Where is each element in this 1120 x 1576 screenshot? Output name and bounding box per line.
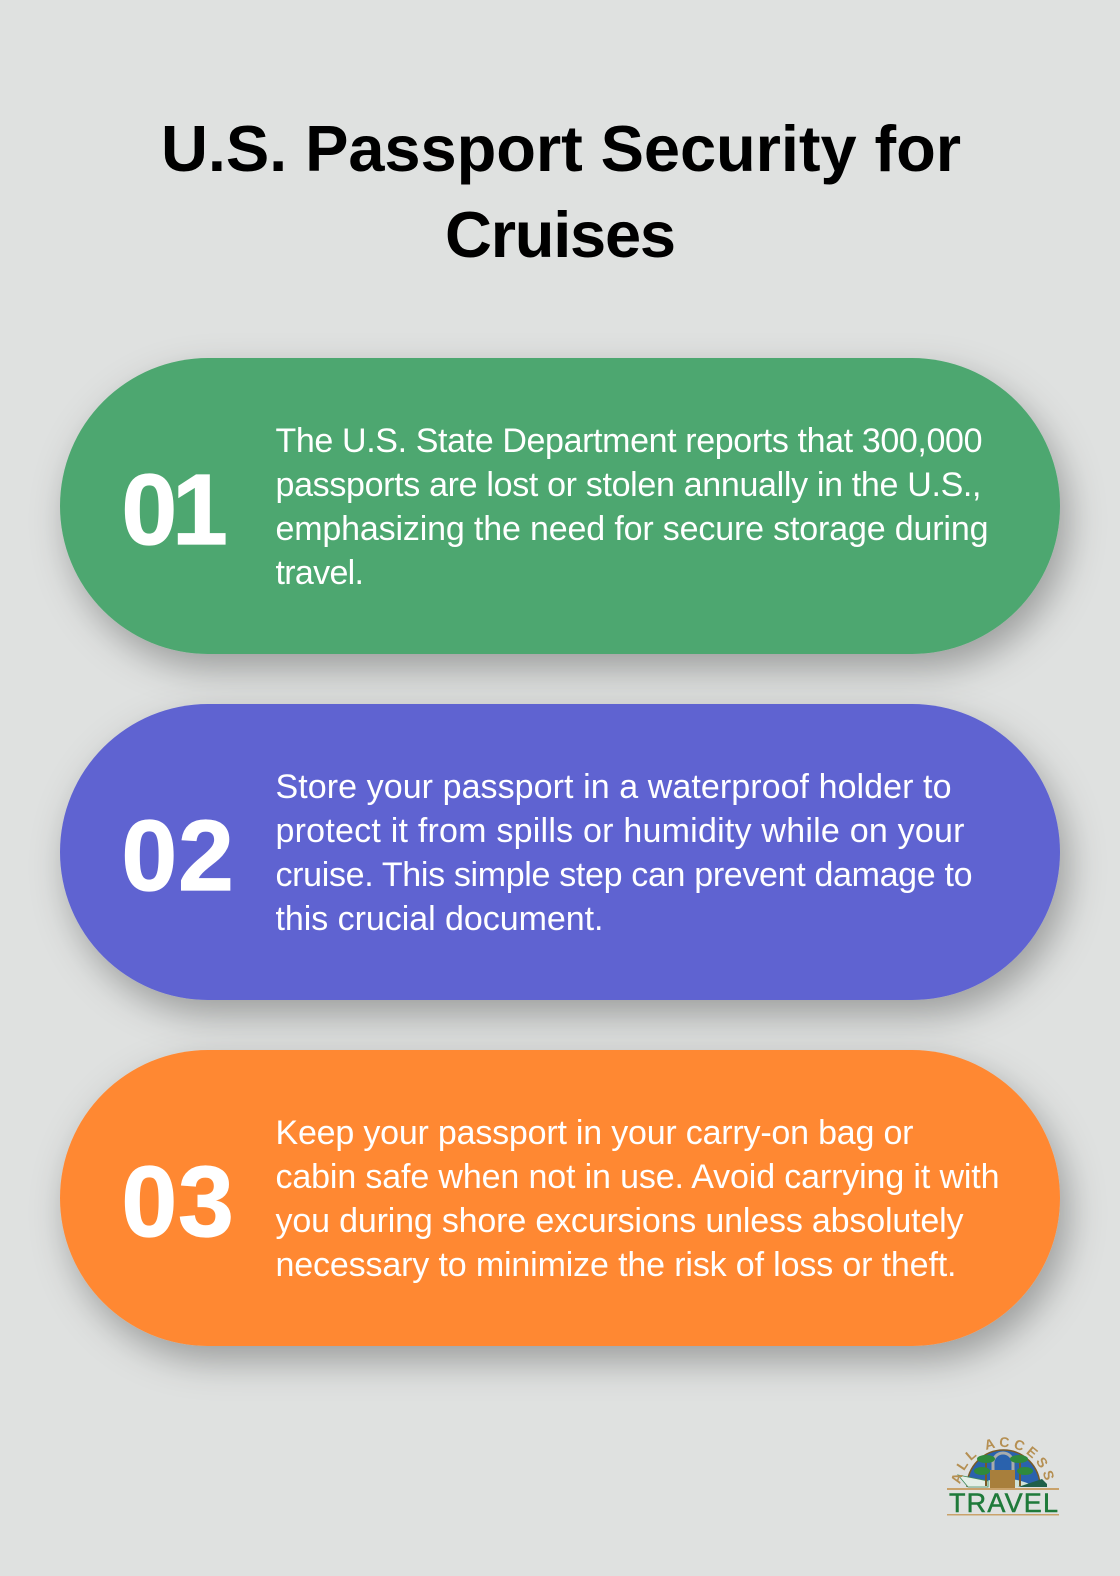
panel: step 03 (60, 1050, 1060, 1346)
logo: All Access Travel: TRAVEL (949, 1488, 1058, 1518)
text block: step 02: Store your passport in a waterproof holder to (276, 768, 952, 806)
title (161, 112, 961, 271)
text block: step 03: cabin safe when not in use. Avoid carrying it with (276, 1158, 1000, 1196)
text block: step 01: emphasizing the need for secure storage during (276, 510, 988, 548)
logo: All Access Travel (947, 1437, 1059, 1518)
number 02: 02 (122, 800, 235, 912)
panel: step 01 (60, 358, 1060, 654)
text block: step 02: cruise. This simple step can prevent damage to (276, 856, 972, 894)
text block: step 03 (276, 1114, 1000, 1284)
text block: step 03: Keep your passport in your carry-on bag or (276, 1114, 914, 1152)
text block: step 01: passports are lost or stolen annually in the U.S., (276, 466, 982, 504)
number 03: 03 (122, 1146, 235, 1258)
text block: step 03: you during shore excursions unless absolutely (276, 1202, 964, 1240)
number 01: 01 (122, 454, 225, 566)
text block: step 01: The U.S. State Department reports that 300,000 (276, 422, 982, 460)
title: U.S. Passport Security for (161, 112, 961, 185)
text block: step 02: this crucial document. (276, 900, 604, 938)
text block: step 01 (276, 422, 988, 592)
panel: step 02 (60, 704, 1060, 1000)
text block: step 02 (276, 768, 972, 938)
title: Cruises (445, 198, 676, 271)
text block: step 02: protect it from spills or humidity while on your (276, 812, 964, 850)
text block: step 03: necessary to minimize the risk of loss or theft. (276, 1246, 956, 1284)
text block: step 01: travel. (276, 554, 364, 592)
logo: All Access Travel: ALL ACCESS (952, 1437, 1054, 1484)
